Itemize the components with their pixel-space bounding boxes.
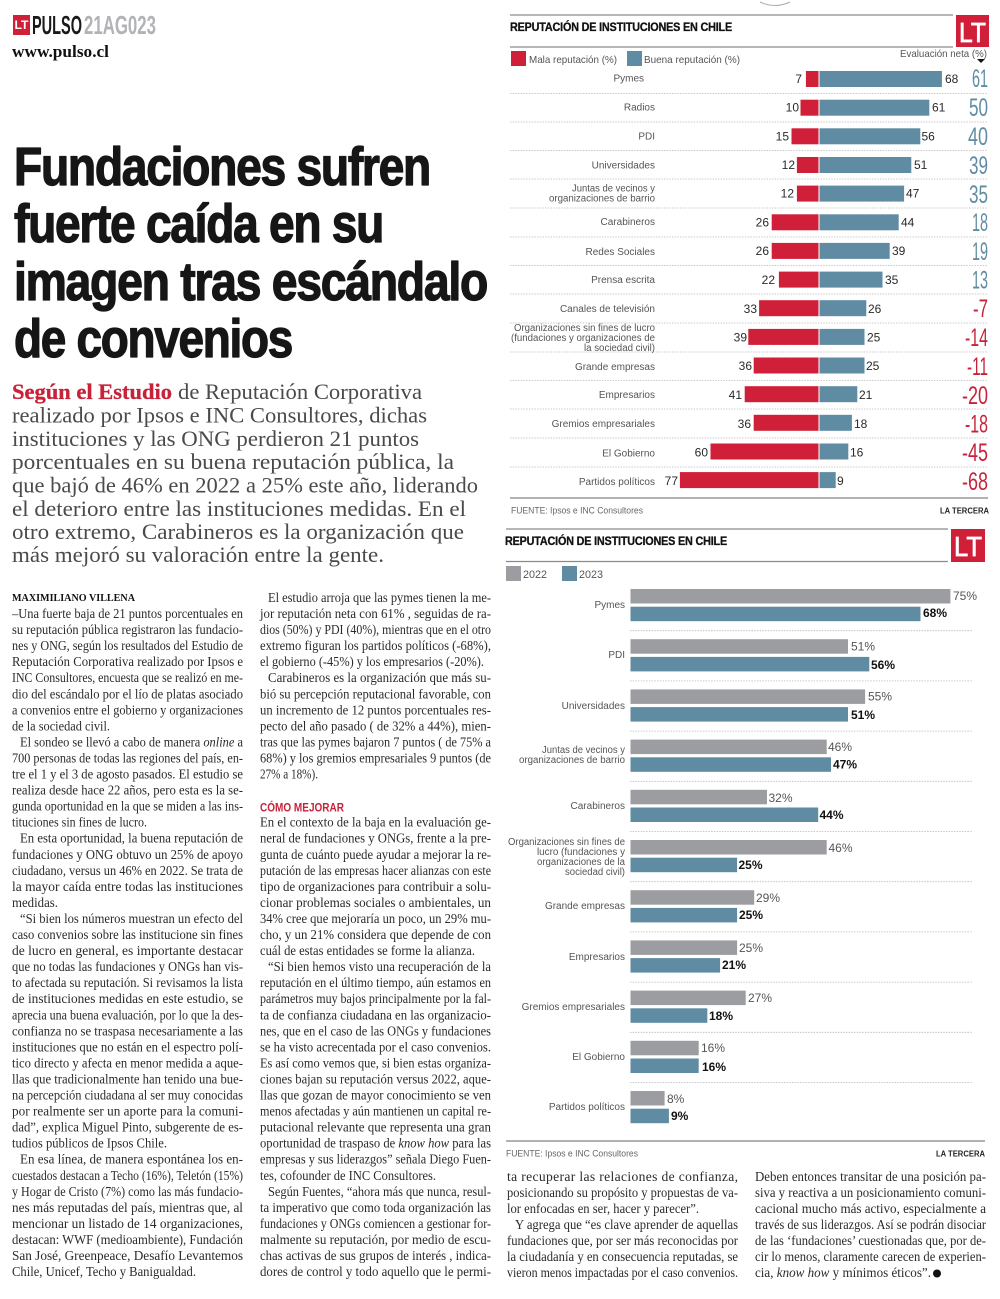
row: Empresarios: [599, 382, 988, 410]
row: Partidos politicos: Partidos políticos: [579, 477, 655, 488]
row: PDI: [638, 123, 988, 151]
header: newspaper section logo and date: PULSO: [32, 10, 82, 40]
row: Universidades: 51: [914, 158, 928, 172]
article column 2: ciones bajan su reputación versus 2022, aque-: [260, 1072, 491, 1086]
article column 1: que no todas las fundaciones y ONGs han vis-: [12, 959, 243, 974]
article column 2: ta de confianza ciudadana en las organizacio-: [260, 1007, 491, 1022]
row: El Gobierno: [602, 439, 988, 467]
row: Grande empresas: 29%: [756, 891, 780, 905]
article column 1: a convenios entre el gobierno y organizaciones: [12, 702, 243, 717]
row: Canales de television: Canales de televisión: [560, 304, 655, 315]
row: Partidos politicos: -68: [962, 468, 988, 496]
row: Carabineros: [571, 790, 844, 822]
article column 1: El sondeo se llevó a cabo de manera online a: [20, 734, 243, 749]
row: Empresarios: 25%: [739, 941, 763, 955]
row: Canales de television: [560, 295, 988, 323]
article column 1: su reputación pública registraron las fundacio-: [12, 622, 243, 637]
article column 1: na percepción ciudadana al ser muy conocidas: [12, 1088, 243, 1102]
article column 2: oportunidad de traspaso de know how para las: [260, 1136, 491, 1151]
article column 2: chas activas de sus grupos de interés , indica-: [260, 1248, 491, 1263]
row: Organizaciones sin fines de lucro: [508, 837, 853, 878]
row: Gremios empresariales: 27%: [748, 991, 772, 1005]
row: Organizaciones sin fines de lucro: 39: [734, 330, 747, 344]
row: Gremios empresariales: [552, 410, 988, 438]
row: Carabineros: [601, 209, 988, 237]
article column 2: bió su percepción reputacional favorable, con: [260, 686, 491, 701]
row: Organizaciones sin fines de lucro: 25: [867, 330, 881, 344]
row: PDI: 51%: [851, 639, 875, 653]
article column 1: San José, Greenpeace, Desafío Levantemos: [12, 1248, 243, 1263]
chart heading: REPUTACIÓN DE INSTITUCIONES EN CHILE: [510, 19, 732, 34]
row: Partidos politicos: 77: [665, 474, 678, 488]
article column 1: de lucro en general, es importante destacar: [12, 943, 243, 958]
article column 2: jor reputación neta con 61% , seguidas de ra-: [259, 606, 491, 621]
article column 1: nes más reputadas del país, mientras que, al: [12, 1200, 243, 1215]
row: PDI: PDI: [608, 650, 625, 661]
row: Universidades: 55%: [868, 690, 892, 704]
article column 2: 68%) y los gremios empresariales 9 puntos (de: [260, 750, 491, 766]
row: Organizaciones sin fines de lucro: sociedad civil): [565, 867, 625, 878]
article column 1: llas que tradicionalmente han tenido una bue-: [12, 1072, 243, 1086]
row: Pymes: 68: [945, 72, 959, 86]
row: Redes Sociales: Redes Sociales: [586, 247, 655, 258]
row: Organizaciones sin fines de lucro: Organizaciones sin fines de: [508, 837, 625, 848]
row: Grande empresas: Grande empresas: [575, 362, 655, 373]
header: newspaper section logo and date: [13, 10, 156, 40]
article column 1: tudios públicos de Ipsos Chile.: [12, 1136, 167, 1151]
row: Pymes: [613, 65, 988, 93]
row: Pymes: 61: [972, 65, 988, 93]
lede paragraph: [12, 379, 478, 567]
title: Fundaciones sufren: [14, 137, 430, 197]
row: Radios: 50: [969, 94, 988, 122]
row: Grande empresas: [575, 353, 988, 381]
article column 4: de las ‘fundaciones’ cuestionadas que, por de-: [755, 1233, 986, 1248]
panel: net reputation chart: [510, 15, 989, 516]
row: Juntas de vecinos: 46%: [828, 740, 852, 754]
row: Juntas de vecinos: Juntas de vecinos y: [572, 184, 655, 194]
chart heading: REPUTACIÓN DE INSTITUCIONES EN CHILE: [505, 533, 727, 548]
source note: LA TERCERA: [940, 506, 989, 516]
row: Pymes: 7: [795, 72, 802, 86]
row: Pymes: [594, 589, 977, 621]
row: Juntas de vecinos: 47: [906, 187, 920, 201]
article column 2: dores de control y todo aquello que le permi-: [260, 1264, 491, 1279]
row: Universidades: Universidades: [592, 160, 655, 172]
row: Gremios empresariales: Gremios empresariales: [522, 1002, 625, 1013]
article column 2: fundaciones y ONGs comiencen a gestionar for-: [260, 1216, 491, 1231]
legend: Mala reputación (%): [529, 54, 617, 66]
article column 1: “Si bien los números muestran un efecto del: [20, 911, 243, 926]
row: Empresarios: Empresarios: [569, 952, 625, 963]
article column 1: 700 personas de todas las regiones del país, en-: [12, 750, 243, 766]
row: Grande empresas: 36: [739, 359, 752, 373]
row: Prensa escrita: [591, 266, 988, 294]
row: Redes Sociales: 19: [972, 238, 988, 266]
row: Carabineros: 44%: [820, 808, 844, 822]
row: Partidos politicos: 9%: [671, 1109, 689, 1123]
header: newspaper section logo and date: 21AG023: [84, 10, 156, 40]
row: Universidades: 39: [969, 152, 988, 180]
article column 1: y Hogar de Cristo (7%) como las más fundacio-: [12, 1184, 243, 1200]
row: Juntas de vecinos: [549, 181, 988, 209]
legend: [511, 51, 740, 66]
article column 2: menos afectadas y aún mantienen un capital re-: [260, 1104, 491, 1119]
article column 4: siva y reactiva a un posicionamiento comuni-: [755, 1185, 986, 1200]
net evaluation column header: Evaluación neta (%): [900, 48, 987, 60]
article column 2: el gobierno (-45%) y los empresarios (-20%).: [260, 654, 484, 670]
article column 2: El estudio arroja que las pymes tienen la me-: [268, 590, 491, 605]
article column 4: Deben entonces transitar de una posición pa-: [755, 1169, 986, 1184]
row: Juntas de vecinos: 47%: [833, 758, 857, 772]
article column 4: cir lo menos, claramente carecen de experien-: [755, 1249, 986, 1264]
article column 1: nes y ONG, según los resultados del Estudio de: [12, 638, 243, 653]
article column 2: extremo figuran los partidos políticos (-68%),: [260, 638, 491, 654]
row: Grande empresas: 25: [866, 359, 880, 373]
article column 1: medidas.: [12, 895, 58, 910]
article column 2: 27% a 18%).: [260, 766, 318, 782]
row: Gremios empresariales: Gremios empresariales: [552, 419, 655, 430]
article column 2: “Si bien hemos visto una recuperación de la: [268, 959, 491, 974]
article column 1: caso convenios sobre las institucione sin fines: [12, 927, 243, 942]
row: Canales de television: 26: [868, 302, 882, 316]
article column 1: Reputación Corporativa realizado por Ipsos e: [12, 654, 243, 669]
lede paragraph: instituciones y las ONG perdieron 21 puntos: [12, 426, 419, 451]
article column 2: 34% cree que mejoraría un poco, un 29% mu-: [260, 911, 491, 926]
lede paragraph: el deterioro entre las instituciones medidas. En el: [12, 496, 466, 521]
row: Canales de television: 33: [744, 302, 757, 316]
row: Universidades: 51%: [851, 708, 875, 722]
title: fuerte caída en su: [14, 194, 383, 254]
article column 2: ta imperativo que como toda organización las: [260, 1200, 491, 1215]
article column 1: En esta oportunidad, la buena reputación de: [20, 831, 243, 846]
article column 3: posicionando su propósito y propuestas de va-: [507, 1185, 738, 1200]
row: Radios: [624, 94, 988, 122]
article column 1: En esa línea, de manera espontánea los en-: [20, 1152, 243, 1167]
article column 1: MAXIMILIANO VILLENA: [12, 592, 135, 604]
row: Prensa escrita: 22: [762, 273, 775, 287]
row: Organizaciones sin fines de lucro: [511, 323, 988, 354]
article column 1: fundaciones y ONG obtuvo un 25% de apoyo: [12, 847, 243, 862]
row: Carabineros: 44: [901, 215, 915, 229]
row: Partidos politicos: Partidos políticos: [549, 1102, 625, 1113]
row: Radios: Radios: [624, 102, 655, 114]
row: Universidades: Universidades: [562, 701, 625, 712]
row: Carabineros: Carabineros: [571, 801, 625, 812]
article column 2: cuál de estas entidades se forme la alianza.: [260, 943, 475, 958]
article column 1: aprecia una buena evaluación, por lo que la des-: [12, 1007, 243, 1022]
row: Organizaciones sin fines de lucro: 25%: [738, 858, 763, 872]
row: Pymes: 68%: [923, 606, 947, 620]
article column 2: dios (50%) y PDI (40%), mientras que en el otro: [260, 622, 491, 638]
row: Pymes: Pymes: [613, 74, 644, 84]
row: Empresarios: 41: [729, 388, 742, 402]
article column 2: pecto del año pasado ( de 32% a 44%), mien-: [260, 718, 491, 734]
article column 3: Y agrega que “es clave aprender de aquellas: [515, 1217, 738, 1232]
row: Gremios empresariales: 18: [854, 417, 868, 431]
lede paragraph: otro extremo, Carabineros es la organización que: [12, 519, 464, 544]
legend: [506, 566, 603, 581]
row: Carabineros: 18: [972, 209, 988, 237]
article column 2: Es así como vemos que, si bien estas organiza-: [260, 1055, 491, 1070]
row: Empresarios: [569, 940, 763, 973]
legend: 2023: [579, 569, 603, 581]
lede paragraph: porcentuales en su buena reputación pública, la: [12, 449, 454, 474]
row: Juntas de vecinos: [519, 740, 857, 772]
row: Pymes: Pymes: [594, 600, 625, 611]
article column 2: empresas y sus liderazgos” señala Diego Fuen-: [260, 1152, 491, 1167]
lede paragraph: Según el Estudio: [12, 379, 172, 404]
row: El Gobierno: El Gobierno: [602, 448, 655, 460]
article column 1: tituciones sin fines de lucro.: [12, 815, 147, 830]
icon: LT logo: LT: [959, 17, 986, 48]
article column 2: Carabineros es la organización que más su-: [268, 670, 491, 685]
article column 1: [11, 592, 243, 1279]
article column 2: nes, que en el caso de las ONGs y fundaciones: [260, 1023, 491, 1038]
row: Universidades: 12: [782, 158, 795, 172]
row: Organizaciones sin fines de lucro: 46%: [828, 841, 853, 855]
article column 1: realiza desde hace 22 años, pero esta es la se-: [12, 783, 243, 798]
row: PDI: 15: [776, 129, 789, 143]
article column 2: En el contexto de la baja en la evaluación ge-: [260, 815, 491, 830]
article column 1: ciudadano, versus un 46% en 2022. Se trata de: [12, 863, 243, 878]
title: imagen tras escándalo: [14, 252, 487, 312]
article column 1: INC Consultores, encuesta que se realizó en me-: [12, 670, 243, 685]
article column 1: tico directo y afecta en menor medida a aque-: [12, 1055, 243, 1070]
article column 2: putacional relevante que representa una gran: [260, 1120, 491, 1135]
row: Organizaciones sin fines de lucro: la sociedad civil): [584, 343, 655, 354]
row: Empresarios: Empresarios: [599, 390, 655, 401]
panel: 2022 vs 2023 chart: [505, 529, 985, 1158]
article column 2: tes, cofounder de INC Consultores.: [260, 1168, 436, 1183]
title: [14, 137, 487, 369]
source note: LA TERCERA: [936, 1148, 985, 1158]
article column 2: Según Fuentes, “ahora más que nunca, resul-: [268, 1184, 491, 1199]
article column 1: de la sociedad civil.: [12, 718, 110, 733]
article column 1: dio del escándalo por el lío de platas asociado: [12, 686, 243, 701]
article column 3: vieron menos impactadas por el caso convenios.: [507, 1265, 738, 1280]
source note: [511, 504, 989, 516]
legend: Buena reputación (%): [644, 54, 740, 66]
row: Carabineros: 26: [756, 215, 769, 229]
article column 1: to afectada su reputación. Si revisamos la lista: [12, 975, 243, 990]
row: El Gobierno: 16%: [702, 1060, 726, 1074]
article column 4: cia, know how y mínimos éticos”.: [755, 1265, 931, 1280]
article column 2: malmente su reputación, por medio de escu-: [260, 1232, 491, 1247]
article column 2: putación de las empresas hacer alianzas con este: [260, 863, 491, 878]
article column 1: –Una fuerte baja de 21 puntos porcentuales en: [11, 606, 243, 621]
row: Redes Sociales: 26: [756, 244, 769, 258]
row: PDI: 40: [968, 123, 988, 151]
row: Juntas de vecinos: organizaciones de barrio: [549, 194, 655, 204]
article column 3: fundaciones que, por ser más reconocidas por: [507, 1233, 738, 1248]
article column 1: la mayor caída entre todas las instituciones: [12, 879, 243, 894]
row: El Gobierno: 16%: [701, 1041, 725, 1055]
row: PDI: [608, 639, 895, 672]
lede paragraph: que bajó de 46% en 2022 a 25% este año, liderando: [12, 472, 478, 498]
lede paragraph: realizado por Ipsos e INC Consultores, dichas: [12, 402, 427, 428]
row: Carabineros: 32%: [768, 791, 793, 805]
row: Juntas de vecinos: 12: [781, 187, 794, 201]
article column 1: tre el 1 y el 3 de agosto pasados. El estudio se: [12, 766, 243, 782]
row: Canales de television: -7: [973, 295, 988, 323]
article column 3: ta recuperar las relaciones de confianza,: [507, 1169, 738, 1184]
source note: FUENTE: Ipsos e INC Consultores: [511, 504, 643, 516]
row: Redes Sociales: 39: [892, 244, 906, 258]
article column 2: CÓMO MEJORAR: [260, 802, 345, 814]
article column 1: gunda oportunidad en la que se miden a las ins-: [12, 799, 243, 814]
row: Partidos politicos: 9: [837, 474, 844, 488]
article column 3: lor enfocadas en ser, hacer y parecer”.: [507, 1201, 699, 1216]
row: Organizaciones sin fines de lucro: lucro (fundaciones y: [537, 847, 625, 858]
row: Radios: 10: [786, 101, 799, 115]
row: Prensa escrita: Prensa escrita: [591, 275, 655, 286]
article column 2: parámetros muy bajos principalmente por la fal-: [260, 991, 491, 1006]
row: Universidades: [592, 152, 988, 180]
article column 2: [259, 590, 491, 1279]
article column 1: Chile, Unicef, Techo y Banigualdad.: [12, 1264, 196, 1279]
article column 1: confianza no se traspasa necesariamente a las: [12, 1023, 243, 1038]
row: El Gobierno: 16: [850, 446, 864, 460]
article column 1: cuestados destacan a Techo (16%), Teletón (15%): [12, 1168, 243, 1184]
row: Organizaciones sin fines de lucro: (fundaciones y organizaciones de: [511, 333, 655, 344]
article column 2: tras que las pymes bajaron 7 puntos ( de 75% a: [260, 734, 491, 750]
row: PDI: 56: [922, 129, 935, 143]
article column 4: cacional mucho más activo, especialmente a: [755, 1201, 986, 1216]
icon: LT logo: LT: [954, 531, 982, 562]
legend: 2022: [523, 569, 547, 581]
article column 1: destacan: WWF (medioambiente), Fundación: [12, 1232, 243, 1248]
row: PDI: PDI: [638, 132, 655, 142]
row: Grande empresas: Grande empresas: [545, 901, 625, 912]
article column 2: cionar problemas sociales o ambientales, un: [260, 895, 491, 910]
row: Gremios empresariales: 18%: [709, 1009, 733, 1023]
article column 2: un incremento de 12 puntos porcentuales res-: [260, 702, 491, 717]
row: Prensa escrita: 13: [972, 266, 988, 294]
source note: [506, 1148, 985, 1158]
article column 2: reputación en el último tiempo, aún estamos en: [260, 975, 491, 990]
row: Redes Sociales: [586, 238, 988, 266]
article column 2: gunta de cuánto puede ayudar a mejorar la re-: [260, 847, 491, 862]
article column 1: dad”, explica Miguel Pinto, subgerente de es-: [12, 1120, 243, 1135]
header: newspaper section logo and date: LT: [14, 18, 29, 32]
article column 2: cho, y un 21% considera que depende de con: [260, 927, 491, 942]
row: Grande empresas: [545, 890, 780, 922]
lede paragraph: más mejoró su valoración entre la gente.: [12, 542, 384, 567]
row: Empresarios: -20: [962, 382, 988, 410]
article column 4: [755, 1169, 986, 1280]
title: de convenios: [14, 309, 292, 369]
article column 2: neral de fundaciones y ONGs, frente a la pre-: [260, 831, 491, 846]
row: Universidades: [562, 689, 892, 722]
article column 1: instituciones que no están en el espectro polí-: [12, 1039, 243, 1054]
article column 3: la ciudadanía y en consecuencia reputadas, se: [507, 1249, 738, 1264]
row: Carabineros: Carabineros: [601, 217, 655, 228]
row: Grande empresas: 25%: [739, 908, 763, 922]
row: Juntas de vecinos: organizaciones de barrio: [519, 755, 625, 766]
row: Empresarios: 21%: [722, 958, 746, 972]
article column 1: por realmente ser un aporte para la comuni-: [12, 1104, 243, 1119]
row: El Gobierno: -45: [962, 439, 988, 467]
row: Gremios empresariales: 36: [738, 417, 751, 431]
row: PDI: 56%: [871, 658, 895, 672]
row: El Gobierno: [572, 1041, 726, 1074]
row: Pymes: 75%: [953, 589, 977, 603]
row: Prensa escrita: 35: [885, 273, 899, 287]
row: Juntas de vecinos: Juntas de vecinos y: [542, 745, 625, 756]
article column 1: de instituciones medidas en este estudio, se: [12, 991, 243, 1006]
row: Organizaciones sin fines de lucro: organizaciones de la: [537, 857, 625, 868]
row: Juntas de vecinos: 35: [969, 181, 988, 209]
article column 2: llas que gozan de mayor conocimiento se ven: [260, 1088, 491, 1102]
lede paragraph: de Reputación Corporativa: [178, 379, 422, 404]
row: El Gobierno: El Gobierno: [572, 1052, 625, 1063]
row: Gremios empresariales: [522, 991, 772, 1023]
row: El Gobierno: 60: [695, 446, 708, 460]
source note: FUENTE: Ipsos e INC Consultores: [506, 1148, 638, 1158]
article column 2: tipo de organizaciones para contribuir a solu-: [260, 879, 491, 894]
row: Organizaciones sin fines de lucro: Organizaciones sin fines de lucro: [514, 323, 655, 334]
row: Partidos politicos: [579, 468, 988, 496]
row: Partidos politicos: 8%: [667, 1092, 685, 1106]
article column 2: se ha visto acrecentada por el caso convenios.: [260, 1039, 491, 1054]
article column 3: [507, 1169, 738, 1280]
article column 1: mencionar un listado de 14 organizaciones,: [12, 1216, 243, 1231]
row: Partidos politicos: [549, 1091, 689, 1123]
row: Radios: 61: [932, 101, 946, 115]
website url: www.pulso.cl: [12, 42, 109, 61]
row: Empresarios: 21: [859, 388, 873, 402]
